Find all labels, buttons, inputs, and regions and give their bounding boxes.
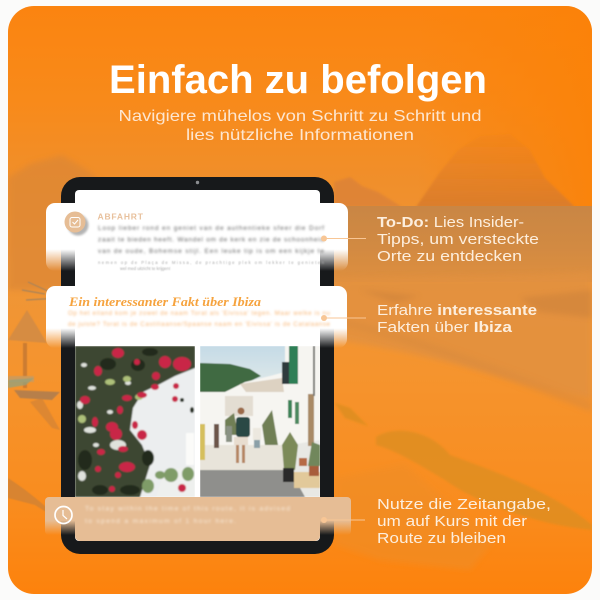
blurred fine print: wel med uitzicht te krijgen! <box>120 266 170 271</box>
annotation: to-do: To-Do: Lies Insider- <box>377 214 524 231</box>
annotation: fakten <box>378 304 536 332</box>
label: Abfahrt: ABFAHRT <box>98 212 144 222</box>
annotation: to-do <box>377 216 538 261</box>
title: Einfach zu befolgen <box>109 58 487 102</box>
blurred body text: Loop lieber rond en geniet van de authentieke sfeer die Dorf <box>98 225 324 232</box>
connector: zeit <box>321 517 365 523</box>
connector: to-do <box>321 236 366 242</box>
blurred orange text <box>68 310 331 328</box>
icon: checklist badge <box>64 212 88 236</box>
blurred body text: van de oude, Bohemse stijl. Een leuke tip is om een kijkje te <box>98 248 324 255</box>
annotation: zeitangabe <box>378 498 550 543</box>
blurred white text: To stay within the time of this route, it is advised <box>85 506 290 512</box>
photo: bougainvillea on white wall <box>75 346 195 497</box>
tablet device <box>61 177 334 554</box>
subtitle: Navigiere mühelos von Schritt zu Schritt und <box>118 108 482 125</box>
card: Zeitangabe bar <box>45 497 351 541</box>
blurred white text <box>85 506 290 525</box>
blurred fine print <box>98 260 325 271</box>
icon: clock <box>55 506 72 524</box>
illustration: beach shoreline <box>334 282 592 398</box>
illustration: dune grass <box>335 403 592 530</box>
card: Interessanter Fakt <box>46 286 347 348</box>
heading: Ein interessanter Fakt: Ein interessanter Fakt über Ibiza <box>68 294 262 309</box>
connector: fakt <box>321 315 366 321</box>
blurred body text <box>98 225 324 255</box>
annotation: to-do: Tipps, um versteckte <box>377 231 539 248</box>
illustration: sand dune <box>338 531 488 568</box>
blurred body text: zaait te bieden heeft. Wandel om de kerk en zie de schoonheid <box>98 236 324 244</box>
tablet screen <box>75 190 320 541</box>
card: Abfahrt <box>46 203 348 271</box>
annotation: fakten: Fakten über Ibiza <box>377 319 513 336</box>
annotation: zeitangabe: Route zu bleiben <box>377 530 506 547</box>
tablet camera <box>196 181 199 184</box>
illustration: sea <box>334 206 592 282</box>
annotation: fakten: Erfahre interessante <box>377 302 537 319</box>
annotation: zeitangabe: Nutze die Zeitangabe, <box>377 496 551 513</box>
illustration: left beach parasols and loungers <box>8 282 62 522</box>
illustration: distant island rocks <box>8 134 575 290</box>
annotation: to-do: Orte zu entdecken <box>377 248 522 265</box>
blurred orange text: Op het eiland kom je zowel de naam Torat als 'Eivissa' tegen. Maar welke is nu <box>68 310 331 317</box>
subtitle <box>120 110 480 140</box>
subtitle: lies nützliche Informationen <box>186 127 414 144</box>
photo: white village street <box>200 346 320 497</box>
blurred orange text: de juiste? Torat is de Castiliaanse/Spaanse naam en 'Eivissa' is de Catalaanse <box>68 321 331 328</box>
blurred white text: to spend a maximum of 1 hour here. <box>85 518 236 525</box>
annotation: zeitangabe: um auf Kurs mit der <box>377 513 527 530</box>
blurred fine print: nemen op de Plaça de Missa, de prachtige plek om lekker te genieten <box>98 260 325 265</box>
